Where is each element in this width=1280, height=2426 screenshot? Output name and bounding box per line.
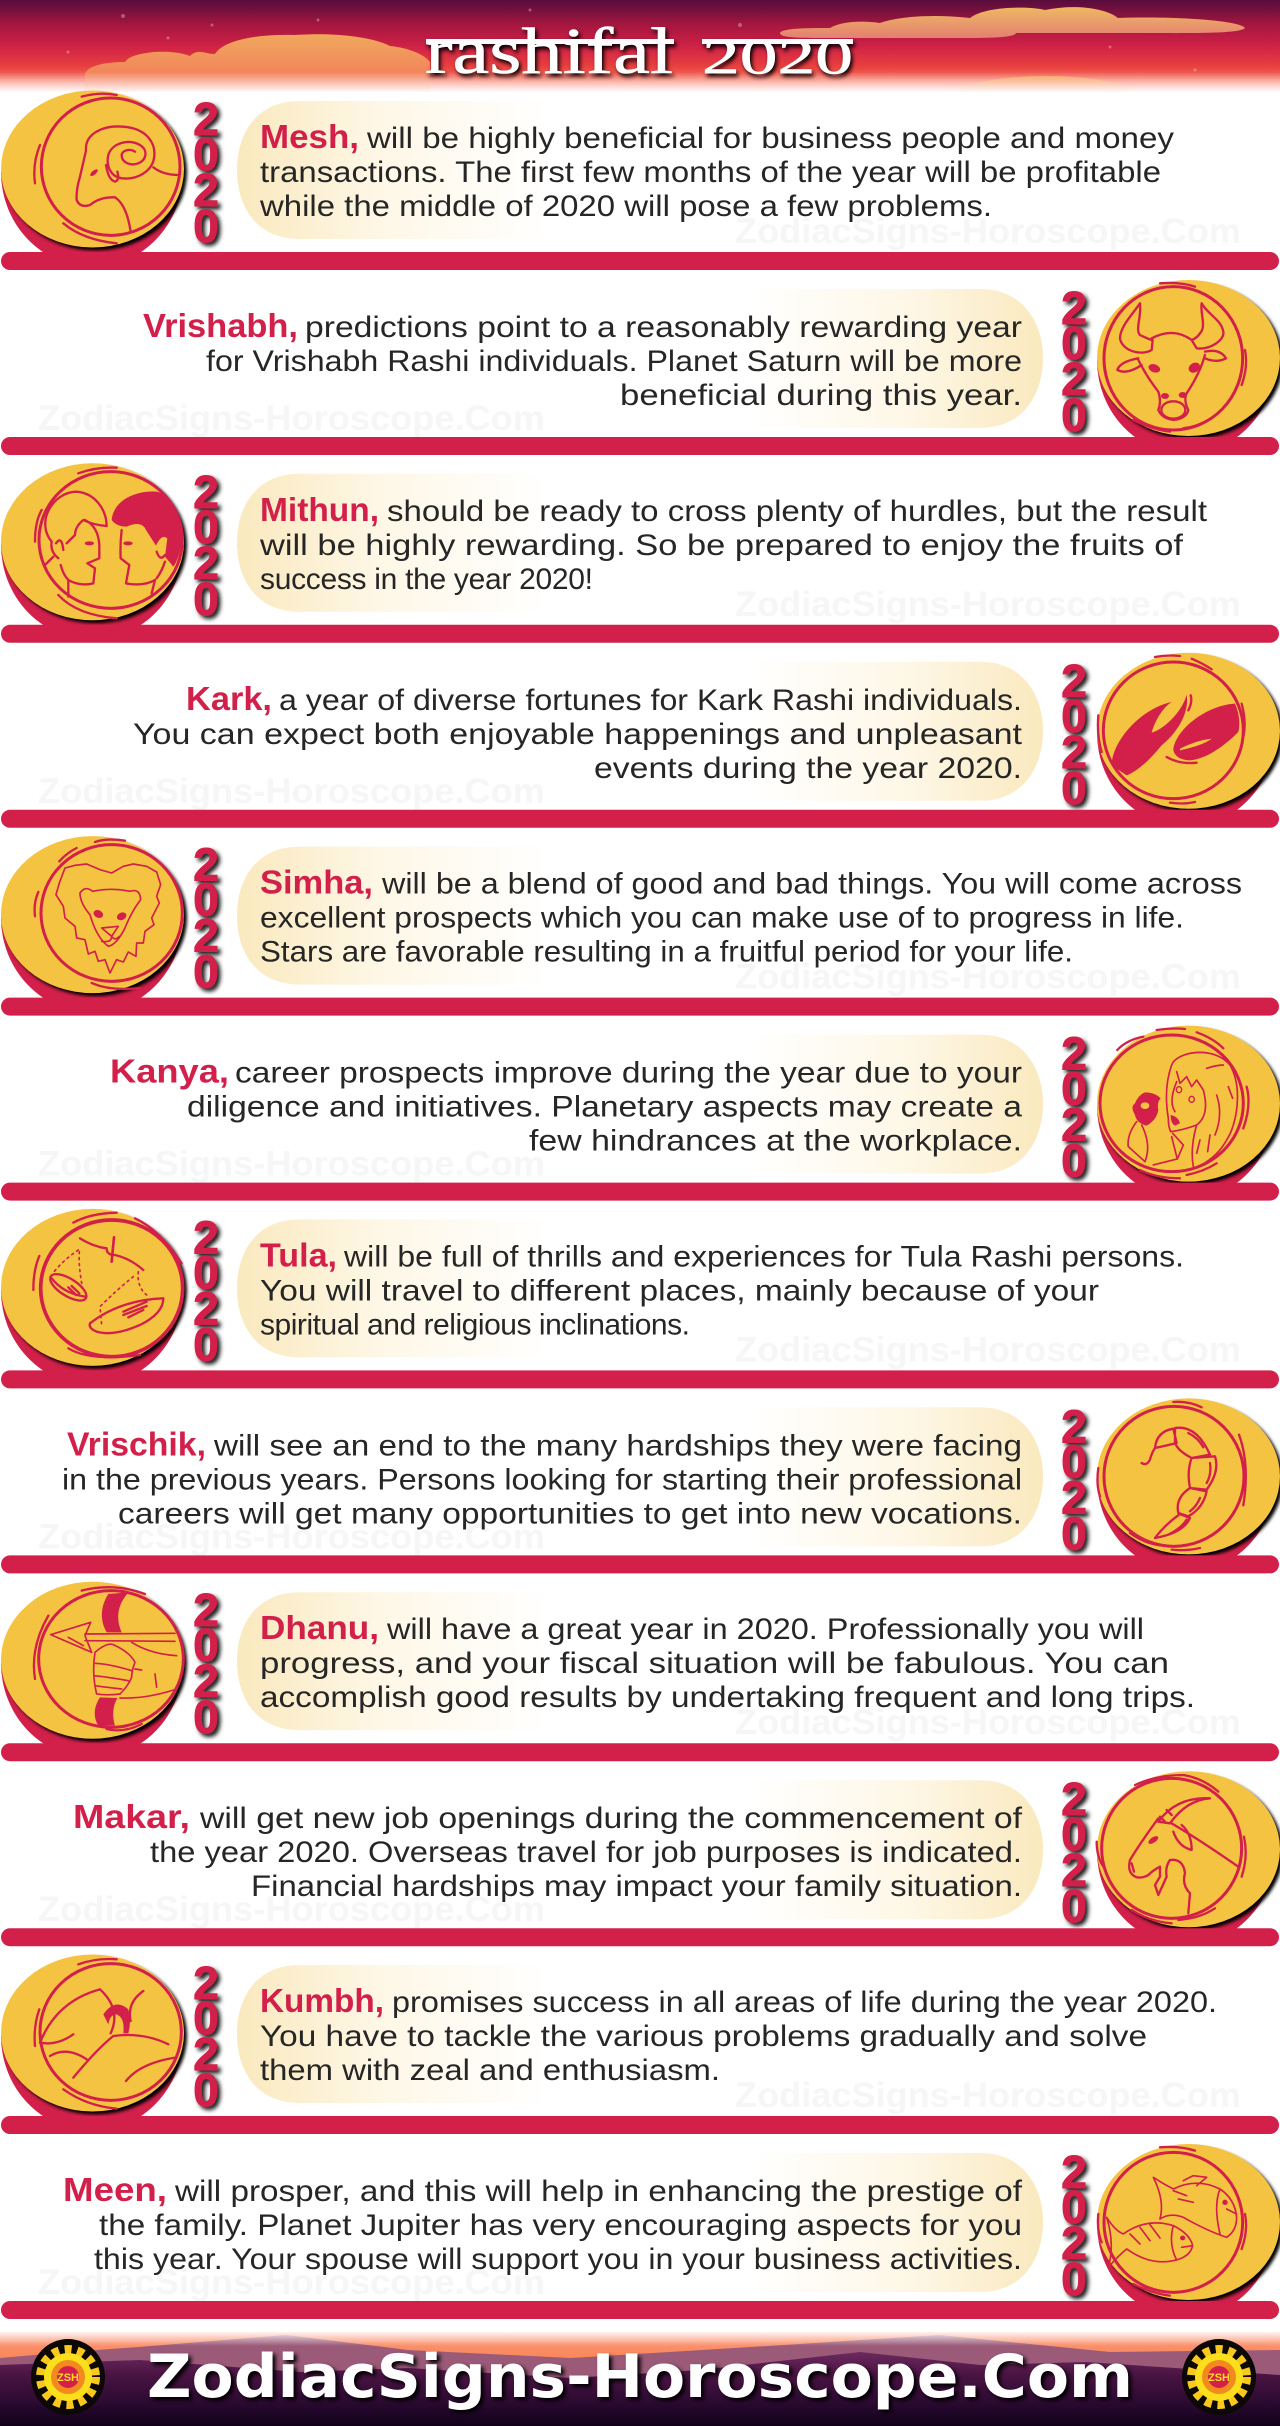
2020 vertical: 0 xyxy=(1061,1135,1087,1187)
right clouds xyxy=(780,7,1245,38)
row 6: Kanya: ZodiacSigns-Horoscope.Com xyxy=(38,1145,545,1184)
coin: Mesh ram xyxy=(1,90,184,267)
2020 vertical xyxy=(1061,282,1087,441)
text block: will have a great year in 2020. Professionally you will xyxy=(386,1613,1144,1646)
icon: scorpion xyxy=(1097,1402,1246,1550)
2020 vertical: 0 xyxy=(193,1691,219,1743)
title xyxy=(425,15,853,88)
coin: Kanya maiden xyxy=(1097,1026,1280,1200)
text block: promises success in all areas of life during the year 2020. xyxy=(392,1986,1217,2019)
text block: a year of diverse fortunes for Kark Rashi individuals. xyxy=(279,684,1022,717)
far mountains xyxy=(0,2335,1280,2426)
row 2: Vrishabh xyxy=(1,280,1280,455)
2020 vertical: 0 xyxy=(1061,1808,1087,1860)
text block: careers will get many opportunities to get into new vocations. xyxy=(118,1497,1022,1530)
footer banner xyxy=(0,2330,1280,2426)
text block xyxy=(260,1609,1195,1714)
2020 vertical: 2 xyxy=(193,93,219,145)
row 8: Vrischik: ZodiacSigns-Horoscope.Com xyxy=(38,1517,545,1556)
text block: Kumbh, xyxy=(260,1982,384,2019)
icon: two fish xyxy=(1098,2147,1246,2296)
text block: predictions point to a reasonably rewarding year xyxy=(305,311,1022,344)
2020 vertical xyxy=(1061,1773,1087,1932)
2020 vertical: 0 xyxy=(193,1619,219,1671)
text block xyxy=(260,1982,1217,2087)
text block: You can expect both enjoyable happenings and unpleasant xyxy=(133,718,1023,751)
2020 vertical xyxy=(1061,2146,1087,2305)
text bubble xyxy=(237,1965,560,2103)
text block: them with zeal and enthusiasm. xyxy=(260,2054,720,2087)
text bubble xyxy=(237,101,560,239)
text block xyxy=(260,864,1242,969)
text block: spiritual and religious inclinations. xyxy=(260,1308,690,1341)
2020 vertical xyxy=(193,1211,219,1370)
text block: Financial hardships may impact your family situation. xyxy=(251,1870,1022,1903)
text block: will get new job openings during the commencement of xyxy=(199,1802,1023,1835)
text block xyxy=(260,1236,1184,1341)
2020 vertical: 2 xyxy=(193,1282,219,1334)
text block: in the previous years. Persons looking for starting their professional xyxy=(62,1463,1022,1496)
row 3: Mithun: ZodiacSigns-Horoscope.Com xyxy=(735,585,1241,624)
icon: twins xyxy=(35,468,182,618)
2020 vertical: 2 xyxy=(193,1211,219,1263)
row 10: Makar xyxy=(1,1771,1280,1946)
text block: excellent prospects which you can make use of to progress in life. xyxy=(260,902,1184,935)
2020 vertical: 2 xyxy=(193,1957,219,2009)
2020 vertical xyxy=(1061,1028,1087,1187)
text block: will be a blend of good and bad things. You will come across xyxy=(381,868,1242,901)
icon: goat xyxy=(1097,1775,1246,1923)
coin: Simha lion xyxy=(1,836,184,1013)
2020 vertical: 2 xyxy=(193,537,219,589)
2020 vertical: 0 xyxy=(1061,762,1087,814)
text block: success in the year 2020! xyxy=(260,563,593,596)
row 5: Simha: ZodiacSigns-Horoscope.Com xyxy=(735,958,1241,997)
stars xyxy=(66,8,1196,72)
2020 vertical: 0 xyxy=(193,128,219,180)
coin: Vrishabh bull xyxy=(1097,280,1280,454)
2020 vertical xyxy=(193,466,219,625)
title: 2020 xyxy=(702,28,853,84)
2020 vertical: 0 xyxy=(193,1992,219,2044)
2020 vertical: 2 xyxy=(193,1584,219,1636)
coin: Vrischik scorpion xyxy=(1097,1398,1280,1572)
icon: bull xyxy=(1104,283,1246,432)
row 2: Vrishabh: ZodiacSigns-Horoscope.Com xyxy=(38,399,545,438)
text block xyxy=(73,1798,1023,1903)
text block: will be highly beneficial for business people and money xyxy=(366,122,1174,155)
text bubble xyxy=(740,1407,1043,1546)
footer icon right xyxy=(1182,2339,1256,2415)
text block: Vrischik, xyxy=(67,1425,206,1462)
row 9: Dhanu: ZodiacSigns-Horoscope.Com xyxy=(735,1703,1241,1742)
left cloud xyxy=(85,34,430,92)
coin: Meen fish xyxy=(1097,2144,1280,2318)
row 4: Kark: ZodiacSigns-Horoscope.Com xyxy=(38,772,545,811)
2020 vertical: 2 xyxy=(1061,1773,1087,1825)
text block: should be ready to cross plenty of hurdles, but the result xyxy=(387,495,1208,528)
icon: crab claws xyxy=(1098,656,1245,804)
text block: will be full of thrills and experiences for Tula Rashi persons. xyxy=(343,1240,1184,1273)
icon: lion xyxy=(35,840,182,989)
row 11: Kumbh: ZodiacSigns-Horoscope.Com xyxy=(735,2076,1241,2115)
text block xyxy=(63,2171,1023,2276)
text block xyxy=(133,680,1023,785)
text block: Makar, xyxy=(73,1798,190,1835)
row 11: Kumbh xyxy=(1,1954,1279,2134)
near mountains xyxy=(0,2352,1280,2426)
2020 vertical: 2 xyxy=(193,2028,219,2080)
2020 vertical: 0 xyxy=(193,1318,219,1370)
text block: Vrishabh, xyxy=(143,307,298,344)
text block: diligence and initiatives. Planetary aspects may create a xyxy=(187,1091,1022,1124)
2020 vertical: 0 xyxy=(1061,690,1087,742)
icon: maiden with flower xyxy=(1100,1029,1249,1178)
text block: Mithun, xyxy=(260,491,379,528)
text bubble xyxy=(740,662,1043,801)
2020 vertical: 0 xyxy=(1061,1063,1087,1115)
2020 vertical: 2 xyxy=(1061,655,1087,707)
title: rashifal xyxy=(425,15,673,88)
text bubble xyxy=(237,1592,560,1730)
icon: scales xyxy=(33,1213,183,1357)
2020 vertical: 2 xyxy=(1061,1844,1087,1896)
2020 vertical: 0 xyxy=(1061,1880,1087,1932)
text block xyxy=(110,1053,1022,1158)
2020 vertical: 2 xyxy=(193,164,219,216)
2020 vertical: 0 xyxy=(1061,2181,1087,2233)
2020 vertical xyxy=(1061,1400,1087,1559)
2020 vertical: 2 xyxy=(193,466,219,518)
2020 vertical: 2 xyxy=(1061,282,1087,334)
text block: Kark, xyxy=(186,680,272,717)
icon: ram xyxy=(34,94,180,243)
row 5: Simha xyxy=(1,836,1279,1016)
2020 vertical: 2 xyxy=(1061,726,1087,778)
2020 vertical xyxy=(193,839,219,998)
text bubble xyxy=(740,289,1043,428)
2020 vertical: 2 xyxy=(1061,2146,1087,2198)
text block: the year 2020. Overseas travel for job purposes is indicated. xyxy=(150,1836,1022,1869)
row 12: Meen xyxy=(1,2144,1280,2319)
text block: Mesh, xyxy=(260,118,359,155)
header banner xyxy=(0,0,1280,93)
text block: this year. Your spouse will support you in your business activities. xyxy=(94,2243,1022,2276)
text block: Kanya, xyxy=(110,1053,229,1090)
2020 vertical: 2 xyxy=(1061,353,1087,405)
footer site name: ZodiacSigns-Horoscope.Com xyxy=(147,2342,1133,2412)
text block xyxy=(259,491,1208,596)
2020 vertical: 0 xyxy=(1061,1435,1087,1487)
text block: You have to tackle the various problems gradually and solve xyxy=(260,2020,1147,2053)
footer icon left xyxy=(31,2339,105,2415)
2020 vertical xyxy=(193,1584,219,1743)
text block xyxy=(143,307,1022,412)
2020 vertical: 0 xyxy=(193,573,219,625)
text block: the family. Planet Jupiter has very encouraging aspects for you xyxy=(99,2209,1022,2242)
row 12: Meen: ZodiacSigns-Horoscope.Com xyxy=(38,2263,545,2302)
coin: Mithun twins xyxy=(1,463,184,640)
row 6: Kanya xyxy=(1,1026,1280,1201)
2020 vertical xyxy=(1061,655,1087,814)
2020 vertical: 0 xyxy=(1061,1507,1087,1559)
row 10: Makar: ZodiacSigns-Horoscope.Com xyxy=(38,1890,545,1929)
row 1: Mesh xyxy=(1,90,1279,270)
text block: Meen, xyxy=(63,2171,167,2208)
row 3: Mithun xyxy=(1,463,1279,643)
icon: bow and arrow xyxy=(34,1587,183,1730)
2020 vertical: 2 xyxy=(193,839,219,891)
2020 vertical: 0 xyxy=(193,501,219,553)
2020 vertical: 0 xyxy=(193,946,219,998)
text bubble xyxy=(740,2153,1043,2292)
2020 vertical: 2 xyxy=(193,910,219,962)
sun xyxy=(955,76,1135,92)
2020 vertical: 2 xyxy=(1061,1028,1087,1080)
text block: will see an end to the many hardships they were facing xyxy=(213,1429,1022,1462)
coin: Kark crab claws xyxy=(1097,653,1280,827)
2020 vertical: 0 xyxy=(1061,389,1087,441)
text block: events during the year 2020. xyxy=(594,752,1022,785)
2020 vertical: 0 xyxy=(193,874,219,926)
text block: beneficial during this year. xyxy=(620,379,1022,412)
text block: You will travel to different places, mainly because of your xyxy=(260,1274,1099,1307)
text block: career prospects improve during the year due to your xyxy=(235,1057,1022,1090)
2020 vertical: 2 xyxy=(1061,1099,1087,1151)
2020 vertical: 0 xyxy=(193,1246,219,1298)
text block: transactions. The first few months of the year will be profitable xyxy=(260,156,1161,189)
text block: few hindrances at the workplace. xyxy=(529,1125,1022,1158)
text bubble xyxy=(237,1219,560,1357)
coin: Makar goat xyxy=(1097,1771,1280,1945)
text bubble xyxy=(740,1035,1043,1174)
text block: will prosper, and this will help in enhancing the prestige of xyxy=(174,2175,1023,2208)
2020 vertical xyxy=(193,1957,219,2116)
coin: Dhanu bow and arrow xyxy=(1,1582,184,1758)
2020 vertical: 2 xyxy=(1061,2217,1087,2269)
2020 vertical: 0 xyxy=(193,200,219,252)
row 7: Tula xyxy=(1,1209,1279,1388)
coin: Tula scales xyxy=(1,1209,184,1385)
2020 vertical xyxy=(193,93,219,252)
text bubble xyxy=(237,474,560,612)
text block: while the middle of 2020 will pose a few problems. xyxy=(259,190,992,223)
row 9: Dhanu xyxy=(1,1582,1279,1761)
2020 vertical: 2 xyxy=(1061,1400,1087,1452)
text bubble xyxy=(237,847,560,985)
text block: accomplish good results by undertaking frequent and long trips. xyxy=(260,1681,1195,1714)
2020 vertical: 0 xyxy=(193,2064,219,2116)
text bubble xyxy=(740,1780,1043,1919)
text block: will be highly rewarding. So be prepared to enjoy the fruits of xyxy=(259,529,1184,562)
text block xyxy=(62,1425,1022,1530)
2020 vertical: 0 xyxy=(1061,317,1087,369)
row 7: Tula: ZodiacSigns-Horoscope.Com xyxy=(735,1330,1241,1369)
2020 vertical: 2 xyxy=(1061,1471,1087,1523)
text block: for Vrishabh Rashi individuals. Planet Saturn will be more xyxy=(206,345,1022,378)
footer icon right: ZSH xyxy=(1208,2372,1230,2384)
text block: Tula, xyxy=(260,1236,337,1273)
text block xyxy=(259,118,1174,223)
footer icon left: ZSH xyxy=(57,2372,79,2384)
text block: progress, and your fiscal situation will be fabulous. You can xyxy=(260,1647,1169,1680)
2020 vertical: 0 xyxy=(1061,2253,1087,2305)
2020 vertical: 2 xyxy=(193,1655,219,1707)
coin: Kumbh water carrier xyxy=(1,1954,184,2131)
row 8: Vrischik xyxy=(1,1398,1280,1573)
text block: Dhanu, xyxy=(260,1609,379,1646)
text block: Simha, xyxy=(260,864,373,901)
row 1: Mesh: ZodiacSigns-Horoscope.Com xyxy=(735,212,1241,251)
row 4: Kark xyxy=(1,653,1280,828)
icon: water pot xyxy=(35,1959,181,2109)
text block: Stars are favorable resulting in a fruitful period for your life. xyxy=(260,936,1073,969)
